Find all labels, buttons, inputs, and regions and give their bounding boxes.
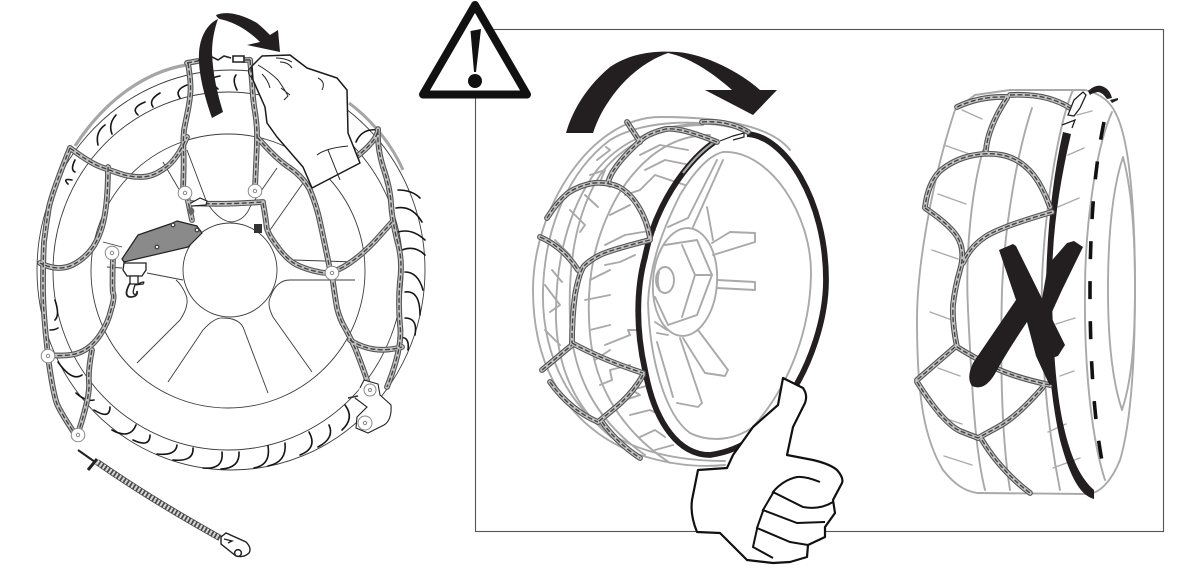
elastic cable <box>78 450 250 557</box>
grey mounting plate <box>122 221 202 262</box>
tension rings <box>41 184 339 442</box>
tyre sidewall arc <box>543 123 735 461</box>
cross mark <box>969 241 1083 388</box>
tyre outline <box>533 117 790 466</box>
tyre tread marks <box>50 75 425 469</box>
tread grooves <box>545 123 720 463</box>
hub and spokes <box>649 160 755 407</box>
tyre rings <box>37 70 425 470</box>
tyre outer arc right <box>349 103 403 170</box>
left wheel with chain <box>37 13 425 557</box>
middle wheel correct fitting <box>533 52 842 563</box>
tread lines <box>930 110 1092 468</box>
tyre outline <box>917 90 1135 494</box>
chains <box>540 122 748 458</box>
top clasp <box>198 56 244 62</box>
hook <box>123 263 146 297</box>
wheel rim ring <box>638 134 826 455</box>
wheel spokes <box>103 150 355 393</box>
clasp <box>1062 92 1086 128</box>
chains <box>917 95 1070 493</box>
black band <box>1046 86 1118 499</box>
tyre outer arc <box>75 65 186 146</box>
tensioner bottom right <box>348 380 391 433</box>
frame <box>476 30 1164 532</box>
clasp <box>720 133 744 141</box>
clasp and connector <box>188 198 262 233</box>
thumbs-up hand <box>692 378 842 563</box>
gray inner rim <box>648 152 811 439</box>
chains <box>40 60 402 437</box>
curved arrow <box>566 52 777 133</box>
thumb finger lines <box>753 477 833 558</box>
curved arrow <box>199 13 280 118</box>
warning triangle icon <box>423 5 527 94</box>
right wheel incorrect fitting <box>917 86 1135 499</box>
hand <box>248 55 360 188</box>
dashed sidewall line <box>1090 122 1106 480</box>
